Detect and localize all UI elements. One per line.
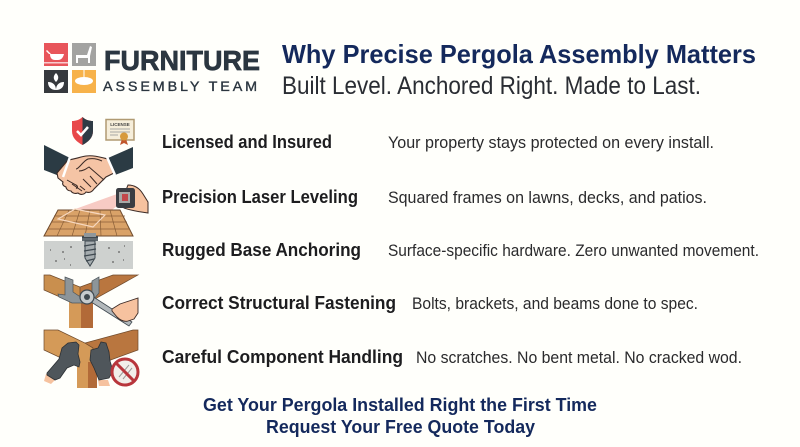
footer call to action line 2: Request Your Free Quote Today (266, 417, 535, 437)
icon: screw anchored in concrete (44, 233, 133, 269)
left beam (44, 275, 82, 301)
title: Why Precise Pergola Assembly Matters (282, 39, 756, 69)
row 2 description: Squared frames on lawns, decks, and patios. (388, 188, 707, 207)
concrete speckles (50, 246, 125, 265)
icon: laser level over deck (44, 185, 148, 236)
metal bracket (58, 277, 99, 303)
logo: Furniture Assembly Team (44, 43, 260, 94)
hand on wrench (112, 298, 138, 321)
anchor bolt (82, 233, 98, 266)
no-scratch sign (112, 359, 138, 385)
right beam (85, 330, 138, 365)
row 1 label: Licensed and Insured (162, 132, 332, 152)
row 3 label: Rugged Base Anchoring (162, 240, 361, 260)
deck boards (44, 210, 133, 236)
row 3 description: Surface-specific hardware. Zero unwanted movement. (388, 241, 759, 260)
right beam (80, 275, 138, 300)
license certificate: LICENSE (110, 122, 130, 127)
post (77, 362, 97, 388)
logo tagline: ASSEMBLY TEAM (103, 78, 260, 94)
laser square on deck (58, 209, 105, 227)
left sleeve (44, 145, 70, 177)
hands (57, 156, 114, 194)
right sleeve (108, 147, 133, 175)
logo tile: grey chair (72, 43, 96, 66)
left beam (44, 330, 93, 365)
logo wordmark: FURNITURE (104, 45, 260, 76)
logo tile: yellow lamp (72, 70, 96, 93)
icon: shield, license and handshake (44, 117, 134, 194)
row 1 description: Your property stays protected on every install. (388, 133, 714, 152)
icon: wrench fastening bracket (44, 275, 138, 328)
wrench (80, 290, 132, 326)
row 4 description: Bolts, brackets, and beams done to spec. (412, 294, 698, 313)
row 5 label: Careful Component Handling (162, 347, 403, 367)
logo tile: red bowl (44, 43, 68, 66)
footer call to action line 1: Get Your Pergola Installed Right the First Time (203, 395, 597, 415)
concrete block (44, 241, 133, 269)
icon: gloved hands on wood joint (44, 330, 138, 388)
logo tile: dark leaves (44, 70, 68, 93)
hand holding laser (122, 185, 148, 213)
laser beam (67, 194, 118, 215)
right wrist (98, 380, 110, 386)
subtitle: Built Level. Anchored Right. Made to Last. (282, 72, 701, 100)
left glove (47, 342, 80, 380)
right glove (90, 342, 113, 380)
laser device (116, 188, 135, 208)
row 2 label: Precision Laser Leveling (162, 187, 358, 207)
shield (72, 117, 93, 145)
row 5 description: No scratches. No bent metal. No cracked wod. (416, 348, 742, 367)
row 4 label: Correct Structural Fastening (162, 293, 396, 313)
post (69, 300, 93, 328)
left wrist (44, 374, 56, 384)
